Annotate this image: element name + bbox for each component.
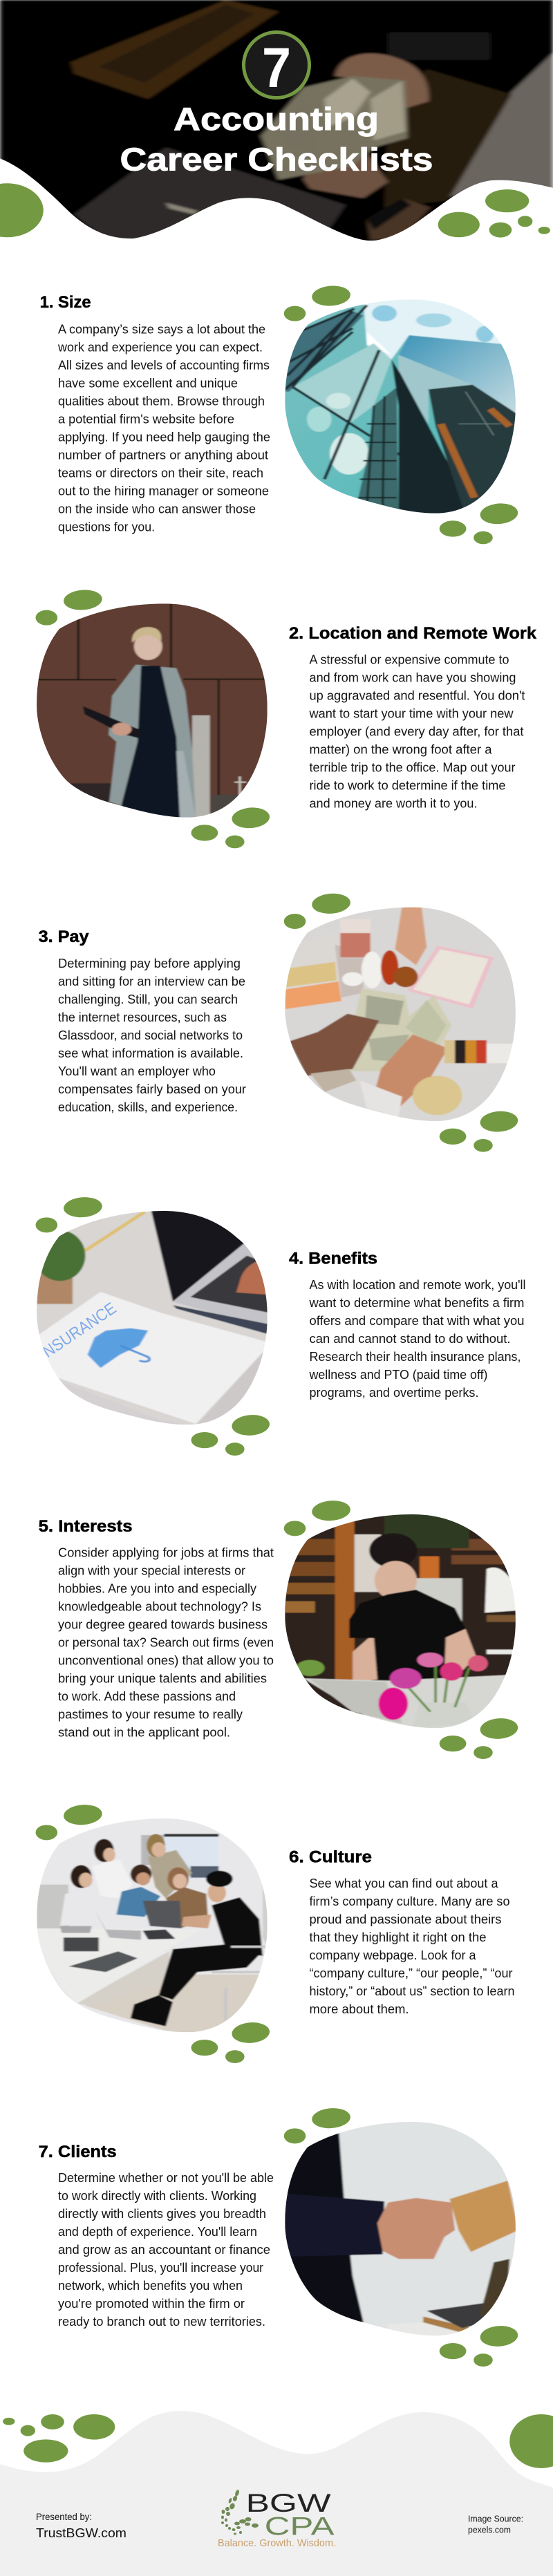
decorative dots: size (284, 283, 521, 544)
heading: size: 1. Size (40, 293, 91, 312)
text: size: questions for you. (58, 520, 155, 534)
text: culture: company webpage. Look for a (310, 1948, 476, 1962)
text: culture: See what you can find out about a (310, 1877, 498, 1890)
text: benefits (308, 1278, 525, 1400)
section 7: clients (39, 2106, 521, 2367)
text: interests: or personal tax? Search out firms (even (58, 1636, 274, 1650)
text: pay: and sitting for an interview can be (58, 975, 245, 988)
photo: glass tower (282, 297, 518, 516)
image source: pexels.com (468, 2525, 511, 2535)
text: location: A stressful or expensive commute to (310, 653, 509, 667)
text: benefits: wellness and PTO (paid time off) (309, 1368, 488, 1382)
section 1: size (40, 283, 521, 544)
text: location: terrible trip to the office. Map out your (310, 761, 516, 775)
title: Career Checklists (120, 142, 433, 178)
label on photo: insurance: INSURANCE (36, 1299, 120, 1364)
text: pay: see what information is available. (58, 1046, 243, 1060)
decorative dots: culture (36, 1803, 273, 2063)
text: pay: education, skills, and experience. (58, 1100, 238, 1114)
section 4: benefits (33, 1195, 526, 1456)
text: benefits: offers and compare that with what you (310, 1314, 524, 1328)
text: location: employer (and every day after, for that (310, 725, 524, 739)
text: location (308, 653, 525, 811)
text: pay: the internet resources, such as (58, 1010, 227, 1024)
text: benefits: want to determine what benefits a firm (308, 1296, 524, 1310)
title: Accounting (174, 101, 379, 137)
text: culture: history,” or “about us” section to learn (310, 1984, 514, 1998)
text: pay: Glassdoor, and social networks to (58, 1028, 243, 1042)
text: interests: your degree geared towards business (58, 1618, 268, 1632)
decorative dots: location (36, 587, 273, 848)
text: interests: pastimes to your resume to really (58, 1708, 243, 1722)
text: benefits: Research their health insurance plans, (310, 1350, 521, 1364)
image source: Image Source: (468, 2514, 523, 2524)
heading: location and remote work: 2. Location and Remote Work (289, 624, 537, 643)
logo mark: dots (221, 2489, 259, 2535)
text: size: number of partners or anything about (58, 448, 268, 462)
section 3: pay (39, 891, 521, 1152)
text: size: A company’s size says a lot about the (58, 322, 265, 336)
text: clients: Determine whether or not you'll be able (58, 2171, 274, 2185)
text: benefits: can and cannot stand to do without. (310, 1332, 510, 1346)
presented by (36, 2511, 126, 2540)
text: size: on the inside who can answer those (58, 502, 256, 516)
text: size: a potential firm's website before (58, 412, 234, 426)
section 5: interests (39, 1498, 521, 1759)
section 6: culture (33, 1803, 515, 2063)
heading: pay: 3. Pay (39, 928, 89, 946)
text: location: matter) on the wrong foot after a (310, 743, 493, 757)
text: size (57, 322, 270, 534)
text: size: have some excellent and unique (58, 376, 238, 390)
text: size: qualities about them. Browse through (58, 394, 265, 408)
heading: culture: 6. Culture (289, 1848, 372, 1867)
text: benefits: As with location and remote work, you'll (310, 1278, 525, 1292)
text: pay (58, 957, 246, 1114)
presented by: TrustBGW.com (36, 2526, 126, 2540)
logo text: CPA (265, 2512, 335, 2541)
decorative dot: footer right (509, 2414, 553, 2468)
heading: interests: 5. Interests (39, 1517, 133, 1536)
text: clients: you're promoted within the firm or (58, 2297, 245, 2311)
number badge: 7 (262, 37, 291, 100)
photo: handshake (282, 2117, 518, 2338)
text: pay: compensates fairly based on your (58, 1082, 246, 1096)
text: size: All sizes and levels of accounting firms (58, 358, 270, 372)
text: size: teams or directors on their site, reach (58, 466, 263, 480)
text: clients: professional. Plus, you'll increase your (58, 2261, 263, 2275)
title (120, 101, 433, 178)
text: size: work and experience you can expect. (57, 340, 263, 354)
text: location: and money are worth it to you. (310, 797, 477, 811)
text: clients: network, which benefits you when (58, 2279, 243, 2293)
photo: counting money (282, 905, 518, 1125)
text: interests: to work. Add these passions and (58, 1690, 236, 1704)
text: size: out to the hiring manager or someone (58, 484, 269, 498)
decorative dots: pay (284, 891, 521, 1152)
text: culture: that they highlight it right on the (310, 1930, 487, 1944)
number badge (243, 32, 310, 100)
decorative dots: benefits (36, 1195, 273, 1456)
text: clients: and depth of experience. You'll learn (58, 2225, 257, 2239)
text: interests: knowledgeable about technology? Is (58, 1600, 261, 1614)
text: interests: unconventional ones) that allow you to (58, 1654, 274, 1668)
heading: clients: 7. Clients (39, 2143, 117, 2161)
text: location: and from work can have you showing (310, 671, 516, 685)
text: clients: directly with clients gives you breadth (58, 2207, 266, 2221)
footer wave background (0, 2411, 553, 2576)
text: culture: firm’s company culture. Many are so (310, 1895, 510, 1908)
logo text: BGW (246, 2489, 331, 2517)
text: clients: to work directly with clients. Working (58, 2189, 256, 2203)
text: interests: Consider applying for jobs at firms that (58, 1546, 274, 1560)
presented by: Presented by: (36, 2511, 92, 2522)
header banner photo with wave edge (0, 0, 553, 244)
text: culture (310, 1877, 514, 2016)
image source (468, 2514, 523, 2535)
text: culture: proud and passionate about theirs (310, 1912, 502, 1926)
text: clients (58, 2171, 274, 2329)
text: size: applying. If you need help gauging the (58, 430, 270, 444)
text: location: up aggravated and resentful. You don't (310, 689, 525, 703)
logo text (218, 2489, 336, 2549)
text: location: want to start your time with your new (308, 707, 514, 721)
section 2: location and remote work (33, 587, 537, 848)
text: culture: more about them. (310, 2002, 409, 2016)
photo: woman in grey coat (33, 601, 270, 820)
text: benefits: programs, and overtime perks. (310, 1386, 478, 1400)
logo text: Balance. Growth. Wisdom. (218, 2537, 336, 2549)
text: pay: challenging. Still, you can search (58, 993, 238, 1006)
text: clients: ready to branch out to new territories. (58, 2315, 265, 2329)
text: pay: Determining pay before applying (58, 957, 241, 970)
decorative dots: clients (284, 2106, 521, 2367)
heading: benefits: 4. Benefits (289, 1250, 377, 1268)
logo: BGW CPA (218, 2489, 336, 2549)
decorative green dots on header (0, 183, 550, 238)
decorative dots: footer left (3, 2414, 115, 2463)
text: location: ride to work to determine if the time (310, 779, 506, 793)
decorative dots: interests (284, 1498, 521, 1759)
text: clients: and grow as an accountant or finance (58, 2243, 270, 2257)
footer band (0, 2411, 553, 2576)
text: interests: hobbies. Are you into and especially (58, 1582, 256, 1596)
photo: woman at laptop with flowers (282, 1512, 518, 1730)
text: pay: You'll want an employer who (58, 1064, 216, 1078)
text: interests (58, 1546, 274, 1740)
text: culture: “company culture,” “our people,” “our (310, 1966, 513, 1980)
photo: team meeting (33, 1816, 272, 2034)
photo: insurance document and laptop (33, 1208, 272, 1427)
text: interests: bring your unique talents and abilities (58, 1672, 267, 1686)
text: interests: stand out in the applicant pool. (58, 1726, 230, 1740)
text: interests: align with your special interests or (58, 1564, 245, 1578)
